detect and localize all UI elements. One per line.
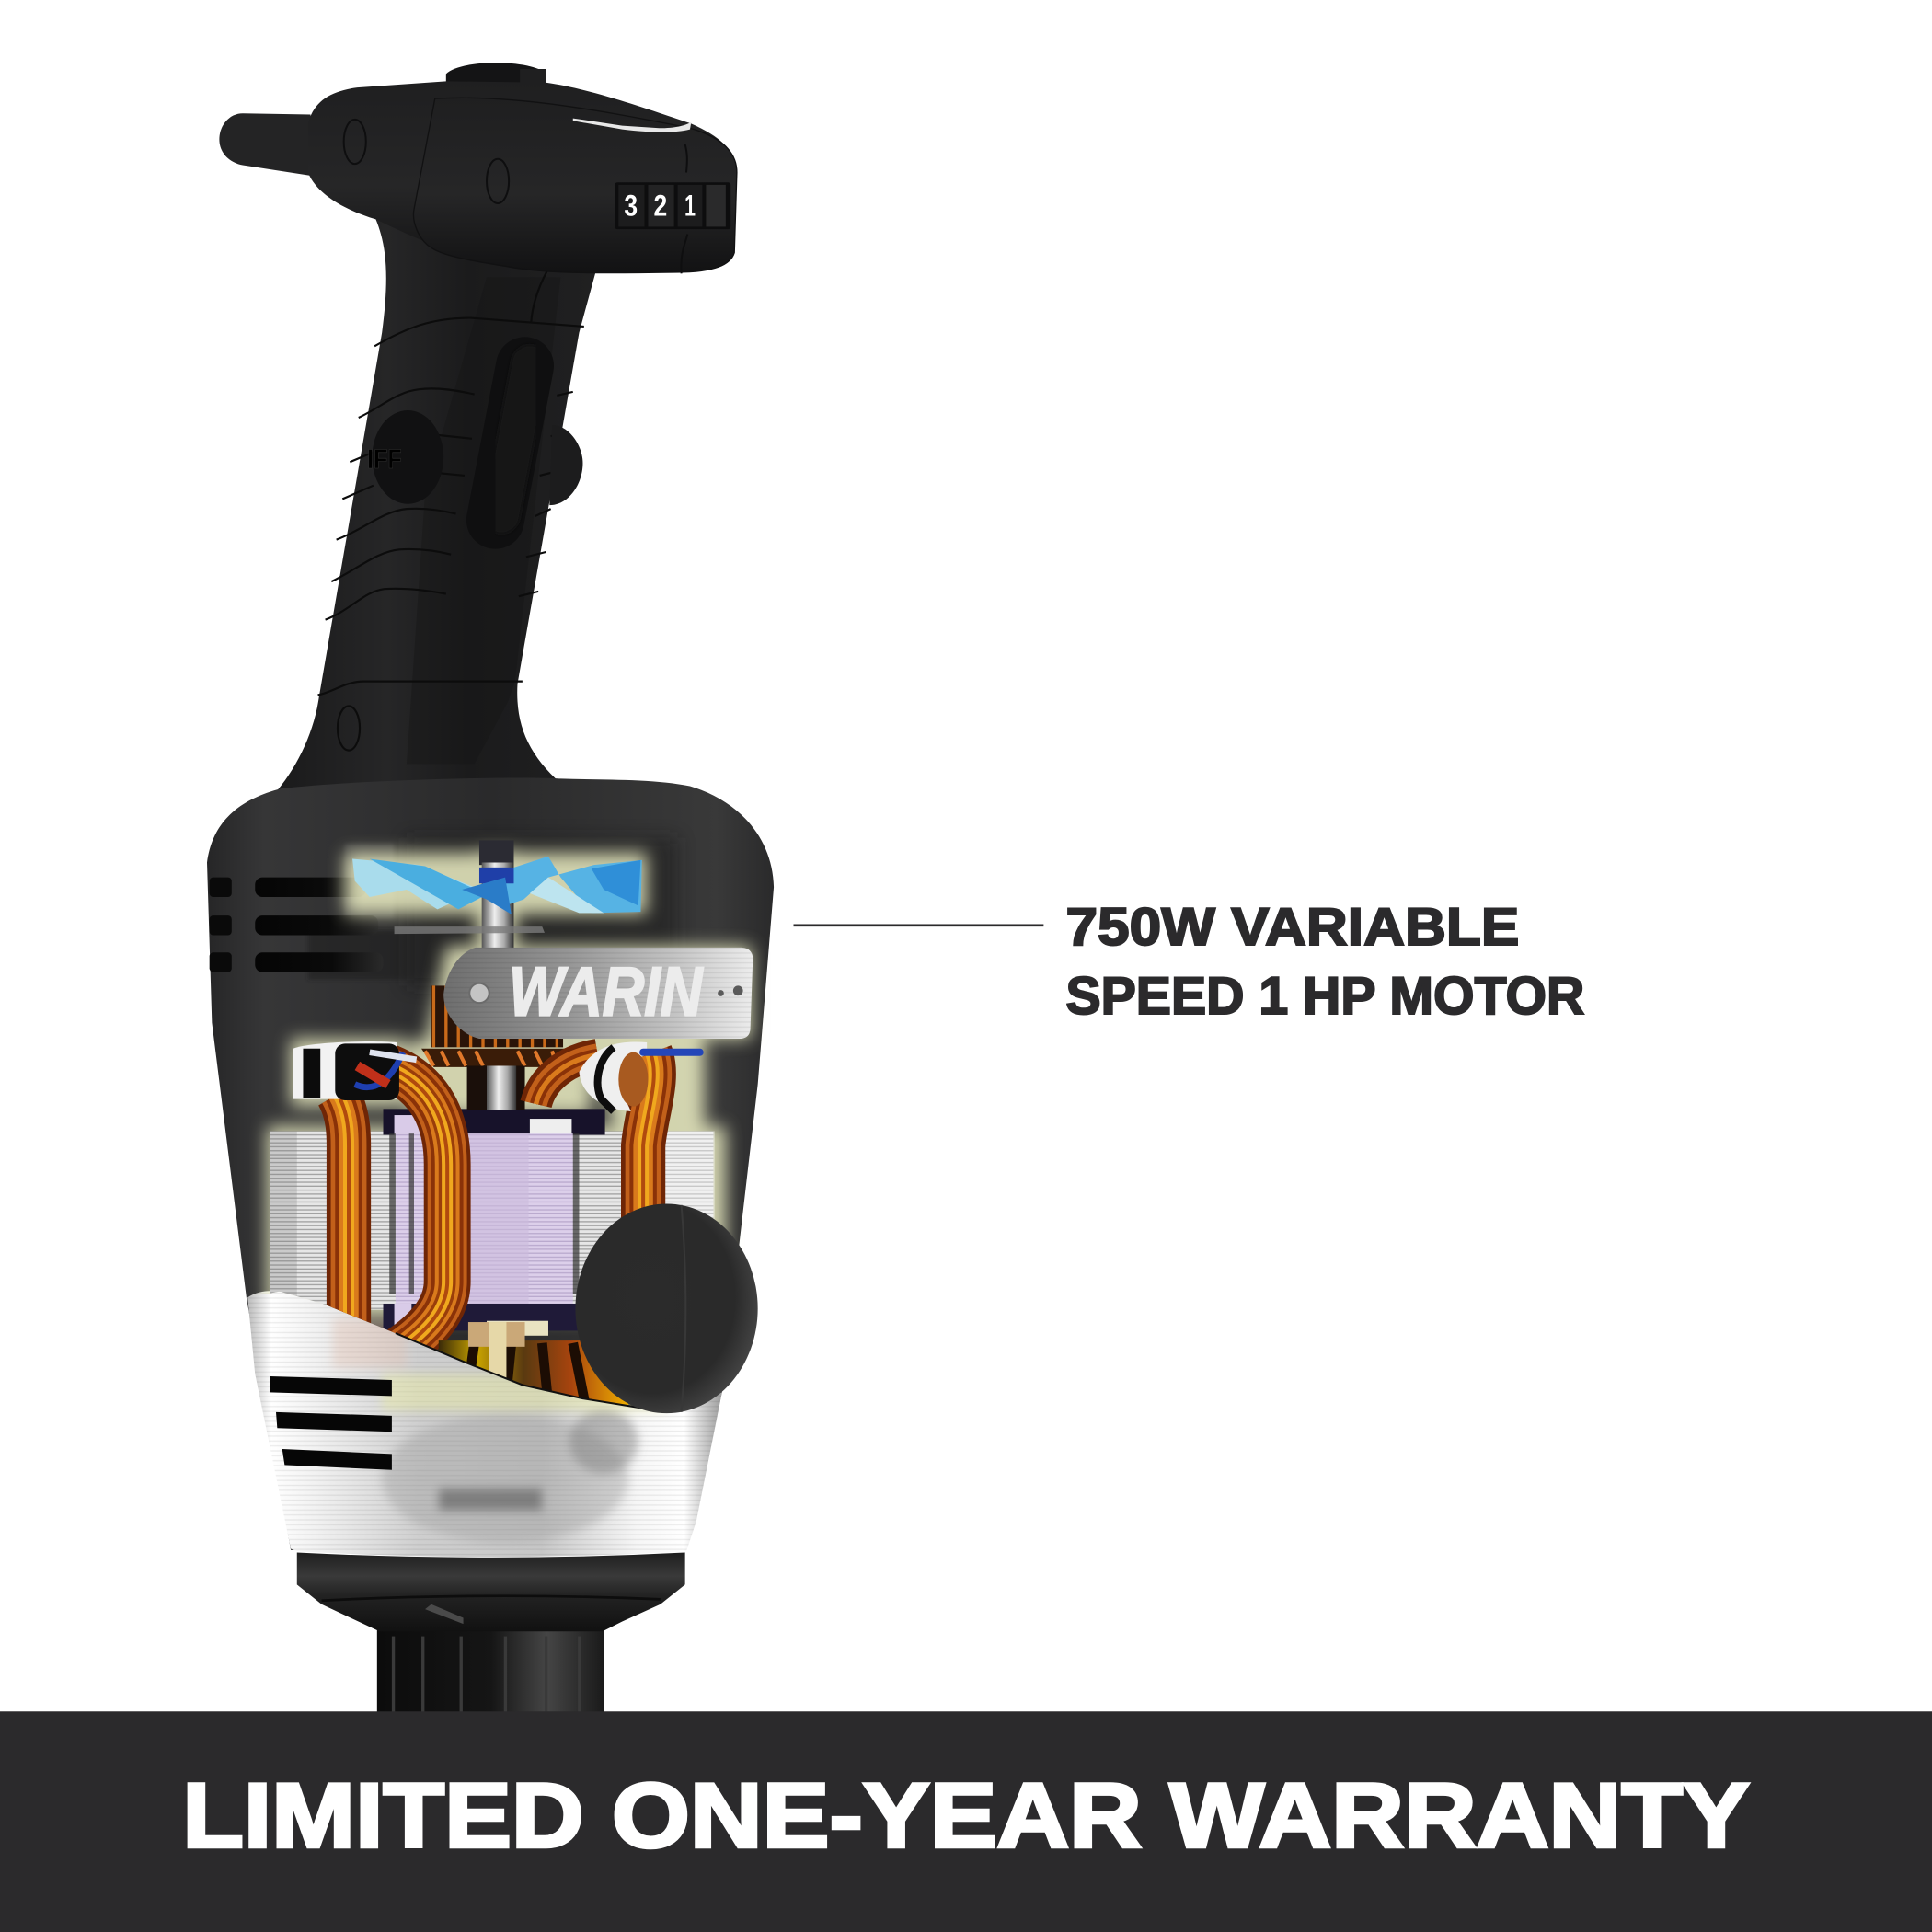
warranty banner [0, 1711, 1932, 1932]
sleeve top edge shadow [396, 1333, 667, 1412]
metal fan ring [395, 926, 545, 934]
lower vents [270, 1376, 392, 1470]
handle head [308, 81, 737, 273]
speed dial: 1 [684, 189, 696, 222]
speed dial: 3 [624, 189, 638, 222]
Waring metal nameplate: WARIN [509, 953, 704, 1030]
rotor top housing [384, 1109, 605, 1134]
upper vents [210, 878, 384, 972]
handle grip [273, 219, 598, 795]
purple rotor core [383, 1133, 580, 1336]
housing ghost internals [308, 838, 678, 985]
rear hanging nub [219, 113, 315, 177]
callout text: SPEED 1 HP MOTOR [1065, 967, 1584, 1026]
speed dial [615, 182, 730, 229]
top button [446, 63, 546, 88]
collar [297, 1553, 685, 1631]
Waring metal nameplate [443, 948, 753, 1039]
speed indicator arc [573, 119, 691, 132]
callout: motor [793, 898, 1584, 1026]
leader line [793, 924, 1043, 926]
right copper winding [643, 1053, 654, 1250]
right arc winding [536, 1054, 598, 1104]
immersion blender product illustration [207, 63, 774, 1715]
motor shaft [479, 840, 513, 949]
speed dial: 2 [653, 189, 667, 222]
shaft coupling at bottom [377, 1629, 604, 1715]
off knob: IFF [367, 444, 402, 475]
silver base sleeve [247, 1291, 722, 1557]
grip ridges [318, 271, 584, 751]
commutator brushes [431, 985, 563, 1047]
callout text [1065, 898, 1584, 1026]
armature gear [421, 1049, 573, 1067]
motor cutaway window [268, 840, 753, 1417]
lower end winding and gears [438, 1322, 628, 1406]
left wire clip [293, 1041, 417, 1100]
centre copper winding [388, 1067, 447, 1350]
blue cooling fan [352, 857, 642, 914]
trigger switch [495, 363, 530, 520]
callout text: 750W VARIABLE [1065, 898, 1519, 957]
right wire clip [579, 1042, 700, 1111]
ghosted internals in sleeve [333, 1318, 665, 1543]
left copper winding [338, 1094, 349, 1325]
large power knob [575, 1203, 758, 1413]
motor housing [207, 777, 774, 1550]
warranty text: LIMITED ONE-YEAR WARRANTY [182, 1765, 1750, 1868]
inner glow [268, 850, 752, 1317]
mounting ovals [344, 120, 687, 273]
right side button [549, 425, 582, 505]
stator laminations [270, 1131, 715, 1310]
rotor spindle [467, 1065, 525, 1110]
off knob [367, 410, 443, 504]
